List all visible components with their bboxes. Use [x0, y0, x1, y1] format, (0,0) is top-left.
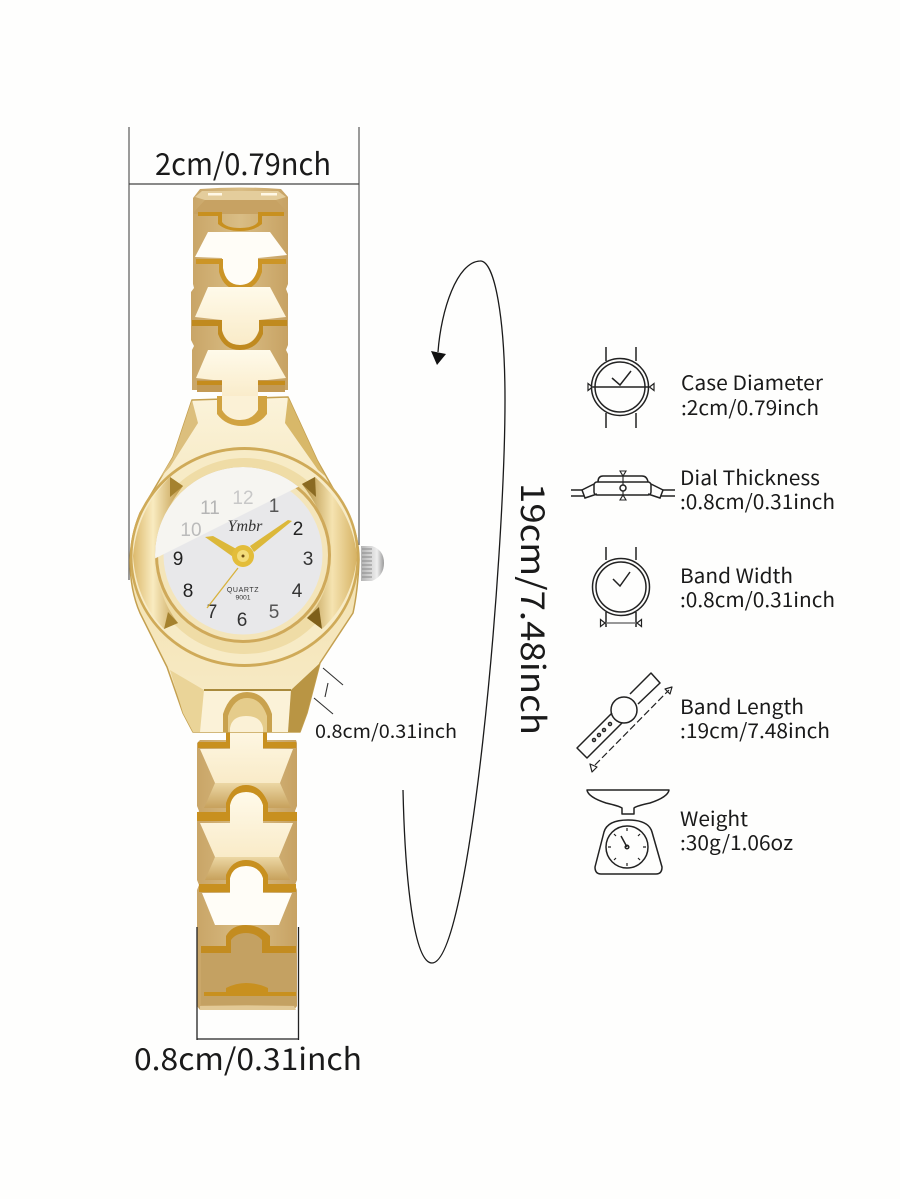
numerals: 8	[183, 581, 193, 602]
bezel	[130, 447, 359, 667]
text: dial thickness	[680, 462, 835, 515]
icon: case diameter	[588, 347, 654, 428]
text: band length: :19cm/7.48inch	[680, 715, 830, 744]
label: thickness: 0.8cm/0.31inch	[315, 717, 457, 744]
link: third cut-out	[202, 866, 292, 925]
upper lug notch and stem	[217, 396, 267, 426]
text: weight: :30g/1.06oz	[680, 827, 793, 856]
text: band length	[680, 691, 830, 744]
text: band length: Band Length	[680, 691, 804, 720]
text: case diameter	[681, 367, 823, 421]
icon: dial thickness	[571, 471, 675, 500]
quartz label: QUARTZ	[227, 587, 259, 594]
numerals	[173, 488, 313, 631]
text: case diameter: :2cm/0.79inch	[681, 392, 819, 421]
lug arch	[223, 692, 272, 732]
link: second cut-out	[195, 287, 286, 345]
numerals: 2	[293, 519, 303, 540]
text: dial thickness: :0.8cm/0.31inch	[680, 486, 835, 515]
link: bottom link	[201, 930, 296, 1005]
link: second cut-out	[200, 792, 293, 857]
numerals: 5	[269, 602, 279, 623]
lower band vertical dimension	[134, 927, 362, 1079]
lower lug	[170, 672, 300, 732]
numerals: 3	[303, 549, 313, 570]
numerals: 9	[173, 549, 183, 570]
text: dial thickness: Dial Thickness	[680, 462, 820, 491]
crown	[361, 546, 384, 581]
label: case width: 2cm/0.79nch	[155, 140, 331, 184]
band length rotated label: 19cm/7.48inch	[511, 483, 559, 735]
numerals: 4	[292, 581, 303, 602]
icon: band width	[592, 547, 650, 627]
model number: 9001	[235, 594, 251, 602]
icon: weight scale	[587, 790, 669, 874]
hands	[205, 520, 292, 608]
text: weight	[680, 803, 793, 856]
dial	[155, 467, 322, 634]
icon: band length	[577, 673, 672, 772]
text: weight: Weight	[680, 803, 748, 832]
numerals: 7	[207, 602, 217, 623]
numerals: 10	[180, 520, 202, 541]
lower watch band	[197, 717, 297, 1010]
upper watch band	[191, 188, 288, 400]
numerals: 6	[237, 610, 247, 631]
wrap-around arrow	[403, 261, 505, 963]
link: first cut-out	[200, 717, 293, 783]
watch case	[130, 396, 384, 732]
label: band width: 0.8cm/0.31inch	[134, 1035, 362, 1079]
link: first cut-out	[195, 232, 287, 285]
upper lug flanks	[160, 400, 198, 478]
numerals: 11	[200, 498, 220, 519]
text: band width: Band Width	[680, 560, 793, 589]
link: third cut-out	[196, 350, 286, 400]
top width dimension	[129, 127, 359, 580]
numerals: 1	[269, 496, 279, 517]
numerals: 12	[232, 488, 254, 509]
brand: Ymbr	[228, 518, 263, 535]
text: band width	[680, 560, 835, 613]
text: case diameter: Case Diameter	[681, 367, 823, 396]
case thickness marker	[314, 668, 457, 744]
text: band width: :0.8cm/0.31inch	[680, 584, 835, 613]
